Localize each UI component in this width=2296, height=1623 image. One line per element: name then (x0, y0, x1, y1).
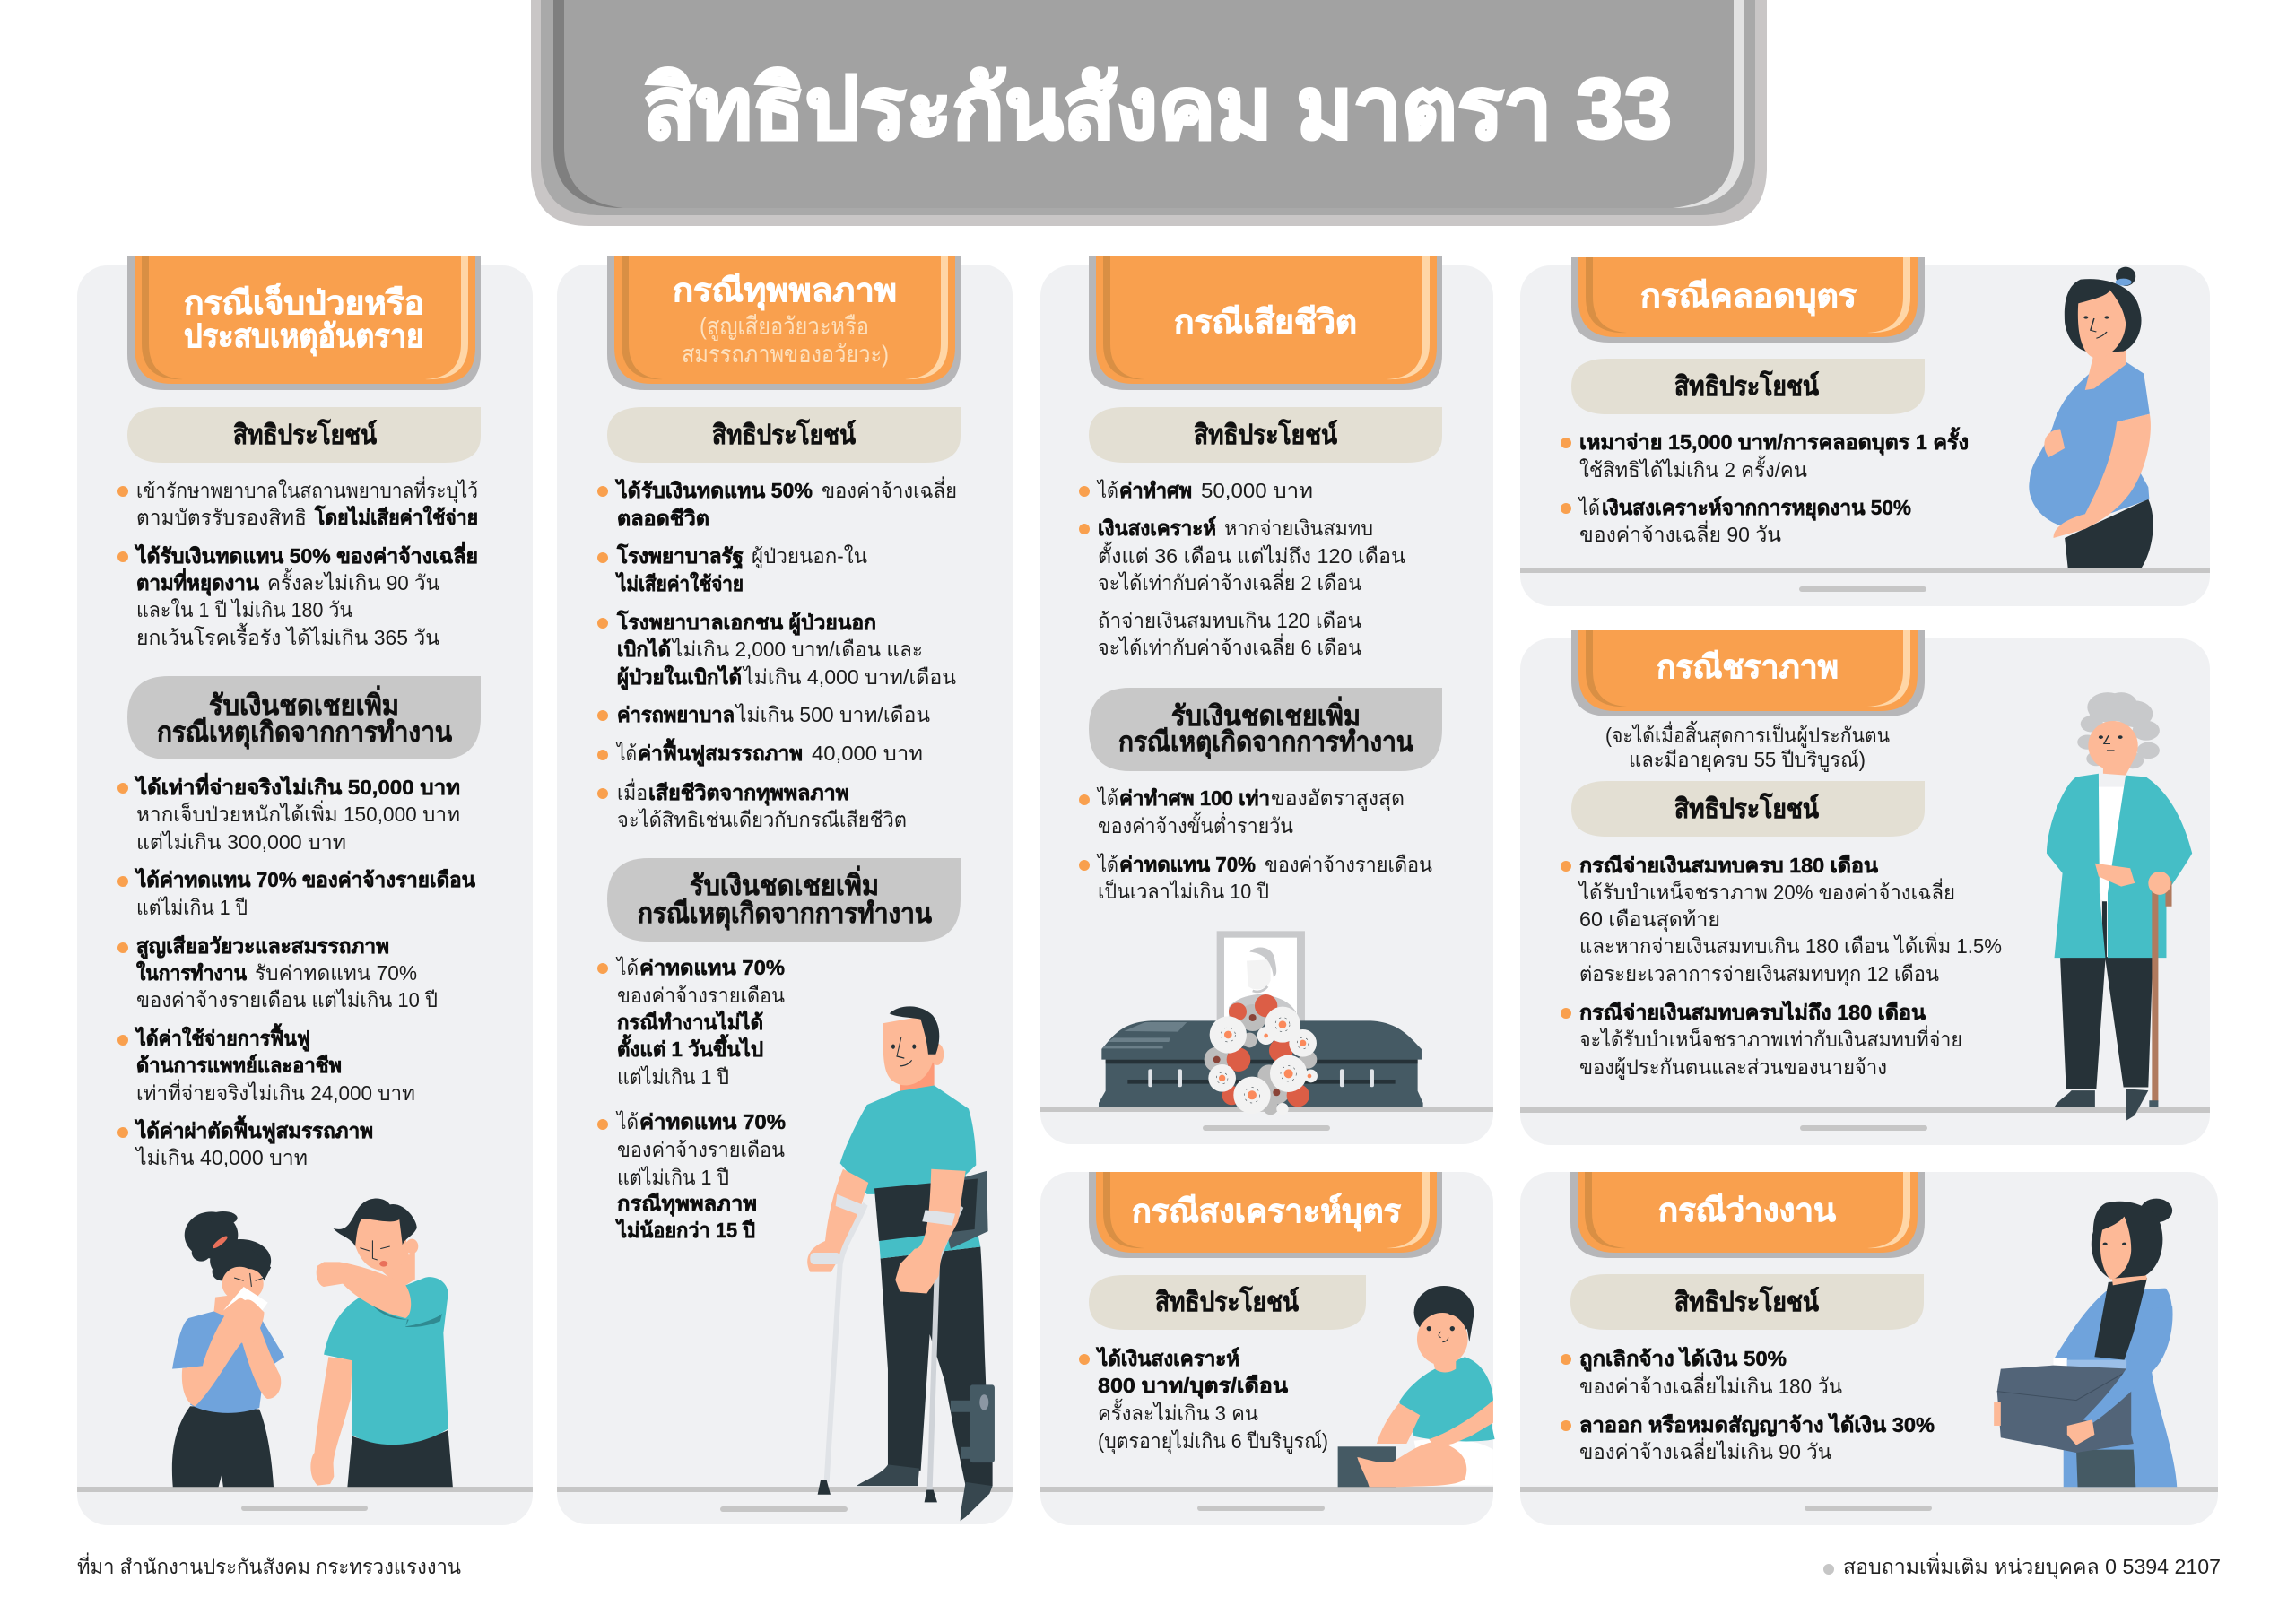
benefit list: เหมาจ่าย 15,000 บาท/การคลอดบุตร 1 ครั้ง (1579, 427, 1969, 456)
compensation list: ของค่าจ้างขั้นต่ำรายวัน (1098, 812, 1293, 838)
benefit list: ไม่เสียค่าใช้จ่าย (614, 571, 744, 595)
benefit list: ลาออก หรือหมดสัญญาจ้าง ได้เงิน 30% (1579, 1412, 1935, 1437)
benefit list (597, 476, 957, 831)
heading: benefits: สิทธิประโยชน์ (1194, 418, 1337, 450)
benefit list: ได้ (1578, 496, 1600, 519)
benefit list (1561, 427, 1969, 546)
tab heading: death (1089, 256, 1442, 390)
benefit list: ผู้ป่วยนอก-ใน (752, 544, 867, 568)
tab heading: childbirth (1571, 257, 1925, 343)
compensation list: ได้ค่าผ่าตัดฟื้นฟูสมรรถภาพ (134, 1115, 373, 1144)
benefit list: ไม่เกิน 500 บาท/เดือน (735, 703, 930, 726)
benefit list: ค่าทำศพ (1119, 479, 1192, 502)
compensation list: แต่ไม่เกิน 1 ปี (617, 1065, 729, 1089)
benefit list: ตามที่หยุดงาน (136, 568, 259, 596)
tab heading: disability: กรณีทุพพลภาพ (673, 272, 897, 311)
benefit list: โรงพยาบาลรัฐ (616, 543, 744, 569)
benefit list: ของค่าจ้างเฉลี่ยไม่เกิน 180 วัน (1579, 1372, 1842, 1398)
benefit list: ของค่าจ้างเฉลี่ย (822, 476, 957, 502)
panel: unemployment (1520, 1172, 2218, 1525)
compensation list: กรณีทำงานไม่ได้ (617, 1010, 763, 1034)
compensation list: ตั้งแต่ 1 วันขึ้นไป (617, 1034, 763, 1061)
compensation list: สูญเสียอวัยวะและสมรรถภาพ (136, 934, 389, 959)
panel: old age (1520, 630, 2210, 1145)
compensation list: ในการทำงาน (136, 960, 247, 985)
benefit list: ยกเว้นโรคเรื้อรัง ได้ไม่เกิน 365 วัน (136, 623, 439, 649)
benefit list: ได้ (615, 742, 637, 765)
illustration: pregnant woman (2029, 267, 2153, 568)
heading: extra compensation (127, 676, 481, 759)
heading: benefits (1570, 1274, 1924, 1330)
heading: benefits: สิทธิประโยชน์ (712, 418, 856, 450)
tab heading: disability: สมรรถภาพของอวัยวะ) (682, 341, 889, 368)
benefit list: ของค่าจ้างเฉลี่ยไม่เกิน 90 วัน (1579, 1437, 1831, 1463)
compensation list: ด้านการแพทย์และอาชีพ (136, 1054, 342, 1077)
heading: extra compensation: กรณีเหตุเกิดจากการทำงาน (157, 716, 452, 750)
tab heading: childbirth: กรณีคลอดบุตร (1640, 277, 1857, 317)
illustration: coffin with portrait and wreath (1099, 931, 1423, 1115)
benefit list: และหากจ่ายเงินสมทบเกิน 180 เดือน ได้เพิ่ม 1.5% (1579, 932, 2002, 958)
heading: benefits: สิทธิประโยชน์ (1674, 792, 1819, 824)
compensation list: ค่าทำศพ 100 เท่า (1119, 786, 1270, 810)
benefit list (1079, 479, 1405, 659)
footer: contact: สอบถามเพิ่มเติม หน่วยบุคคล 0 5394 2107 (1843, 1552, 2221, 1579)
heading: benefits: สิทธิประโยชน์ (1155, 1285, 1299, 1317)
compensation list: ของค่าจ้างรายเดือน แต่ไม่เกิน 10 ปี (136, 988, 438, 1011)
heading: extra compensation: รับเงินชดเชยเพิ่ม (209, 685, 399, 721)
benefit list: จะได้สิทธิเช่นเดียวกับกรณีเสียชีวิต (617, 808, 907, 831)
benefit list: เสียชีวิตจากทุพพลภาพ (648, 781, 849, 806)
compensation list: ได้ (1096, 786, 1118, 810)
tab heading: unemployment: กรณีว่างงาน (1658, 1192, 1836, 1228)
benefit list: เงินสงเคราะห์ (1098, 516, 1216, 540)
panel: sickness or injury (77, 256, 533, 1525)
tab heading: death: กรณีเสียชีวิต (1174, 303, 1357, 340)
heading: benefits (1089, 407, 1442, 463)
footer: source: ที่มา สำนักงานประกันสังคม กระทรวงแรงงาน (77, 1552, 461, 1578)
benefit list: ได้รับเงินทดแทน 50% (614, 478, 813, 502)
benefit list: ถูกเลิกจ้าง ได้เงิน 50% (1579, 1346, 1787, 1372)
tab heading: child allowance: กรณีสงเคราะห์บุตร (1132, 1193, 1402, 1232)
compensation list: ได้ (615, 956, 639, 979)
benefit list: ได้รับบำเหน็จชราภาพ 20% ของค่าจ้างเฉลี่ย (1578, 878, 1955, 904)
compensation list: ได้ (615, 1110, 639, 1133)
illustration: elderly woman with cane (2047, 692, 2192, 1120)
tab heading: disability (607, 256, 961, 390)
benefit list: โดยไม่เสียค่าใช้จ่าย (314, 505, 478, 529)
compensation list: ค่าทดแทน 70% (639, 956, 785, 979)
compensation list: ของอัตราสูงสุด (1271, 786, 1405, 811)
tab heading: child allowance (1089, 1172, 1442, 1258)
benefit list: ถ้าจ่ายเงินสมทบเกิน 120 เดือน (1098, 609, 1361, 632)
heading: benefits: สิทธิประโยชน์ (233, 418, 377, 450)
benefit list: ได้เงินสงเคราะห์ (1095, 1346, 1239, 1370)
compensation list: แต่ไม่เกิน 1 ปี (617, 1166, 729, 1189)
benefit list: ตามบัตรรับรองสิทธิ (136, 506, 307, 529)
heading: benefits (127, 407, 481, 463)
benefit list: 800 บาท/บุตร/เดือน (1098, 1374, 1288, 1399)
note: eligibility (1605, 721, 1890, 772)
benefit list: ค่าฟื้นฟูสมรรถภาพ (638, 738, 803, 767)
benefit list: จะได้เท่ากับค่าจ้างเฉลี่ย 2 เดือน (1098, 568, 1361, 595)
compensation list: กรณีทุพพลภาพ (617, 1192, 757, 1217)
compensation list: ได้เท่าที่จ่ายจริงไม่เกิน 50,000 บาท (134, 772, 460, 799)
tab heading: sickness: ประสบเหตุอันตราย (184, 317, 423, 357)
benefit list: (บุตรอายุไม่เกิน 6 ปีบริบูรณ์) (1098, 1429, 1328, 1454)
tab heading: old age: กรณีชราภาพ (1657, 648, 1839, 685)
benefit list: กรณีจ่ายเงินสมทบครบไม่ถึง 180 เดือน (1579, 1000, 1926, 1024)
benefit list (1561, 1346, 1935, 1463)
benefit list (1079, 1346, 1328, 1454)
tab heading: disability: (สูญเสียอวัยวะหรือ (700, 313, 869, 341)
compensation list: ค่าทดแทน 70% (639, 1110, 786, 1133)
illustration: child sitting with box (1338, 1286, 1495, 1487)
heading: benefits (1571, 359, 1925, 414)
benefit list: หากจ่ายเงินสมทบ (1224, 516, 1373, 540)
title text: สิทธิประกันสังคม มาตรา 33 (643, 61, 1672, 157)
benefit list (117, 476, 478, 649)
benefit list: ของผู้ประกันตนและส่วนของนายจ้าง (1579, 1055, 1887, 1080)
panel: childbirth (1520, 257, 2210, 606)
heading: extra compensation (607, 858, 961, 942)
compensation list (1079, 786, 1432, 903)
panel: disability (557, 256, 1013, 1524)
compensation list: ไม่น้อยกว่า 15 ปี (614, 1218, 755, 1242)
benefit list: เมื่อ (617, 778, 648, 804)
illustration: woman sneezing and man coughing (172, 1199, 453, 1487)
panel: death (1040, 256, 1493, 1144)
compensation list: เป็นเวลาไม่เกิน 10 ปี (1098, 878, 1269, 903)
benefit list: ต่อระยะเวลาการจ่ายเงินสมทบทุก 12 เดือน (1579, 962, 1939, 986)
compensation list: ของค่าจ้างรายเดือน (1265, 853, 1432, 876)
benefit list: ไม่เกิน 4,000 บาท/เดือน (742, 665, 956, 689)
benefit list: เงินสงเคราะห์จากการหยุดงาน 50% (1602, 496, 1911, 521)
compensation list (117, 772, 475, 1169)
tab heading: sickness: กรณีเจ็บป่วยหรือ (184, 282, 424, 321)
illustration: man on crutches (807, 1006, 995, 1521)
benefit list: จะได้เท่ากับค่าจ้างเฉลี่ย 6 เดือน (1098, 633, 1361, 659)
compensation list (597, 956, 786, 1242)
tab heading: sickness (127, 256, 481, 390)
benefit list: ค่ารถพยาบาล (617, 703, 735, 726)
heading: extra compensation: รับเงินชดเชยเพิ่ม (690, 865, 879, 901)
benefit list: 40,000 บาท (812, 742, 923, 765)
benefit list: กรณีจ่ายเงินสมทบครบ 180 เดือน (1579, 854, 1878, 877)
benefit list: ใช้สิทธิได้ไม่เกิน 2 ครั้ง/คน (1579, 456, 1807, 482)
heading: extra compensation: กรณีเหตุเกิดจากการทำงาน (1118, 726, 1413, 759)
heading: benefits (1571, 781, 1925, 837)
benefit list: ของค่าจ้างเฉลี่ย 90 วัน (1579, 520, 1781, 546)
benefit list: ครั้งละไม่เกิน 3 คน (1098, 1399, 1258, 1425)
benefit list: ครั้งละไม่เกิน 90 วัน (267, 568, 439, 595)
benefit list: เข้ารักษาพยาบาลในสถานพยาบาลที่ระบุไว้ (136, 476, 478, 503)
panel: child allowance (1040, 1172, 1495, 1525)
benefit list (1561, 854, 2002, 1080)
illustration: woman carrying box (1994, 1199, 2177, 1487)
compensation list: ได้ค่าทดแทน 70% ของค่าจ้างรายเดือน (134, 867, 475, 891)
benefit list: ผู้ป่วยในเบิกได้ (617, 664, 742, 690)
benefit list: ตลอดชีวิต (617, 507, 709, 530)
benefit list: เบิกได้ (617, 637, 671, 661)
benefit list: ได้ (1096, 479, 1118, 502)
benefit list: จะได้รับบำเหน็จชราภาพเท่ากับเงินสมทบที่จ่าย (1579, 1025, 1962, 1051)
compensation list: ของค่าจ้างรายเดือน (617, 984, 785, 1007)
compensation list: แต่ไม่เกิน 300,000 บาท (136, 830, 346, 854)
benefit list: ตั้งแต่ 36 เดือน แต่ไม่ถึง 120 เดือน (1098, 542, 1405, 568)
heading: benefits (1089, 1275, 1366, 1330)
title banner (531, 0, 1767, 226)
heading: extra compensation (1089, 688, 1442, 771)
compensation list: เท่าที่จ่ายจริงไม่เกิน 24,000 บาท (136, 1079, 415, 1105)
heading: benefits (607, 407, 961, 463)
compensation list: ได้ค่าใช้จ่ายการฟื้นฟู (134, 1023, 310, 1052)
heading: extra compensation: กรณีเหตุเกิดจากการทำงาน (638, 898, 932, 931)
benefit list: 60 เดือนสุดท้าย (1579, 907, 1720, 932)
compensation list: รับค่าทดแทน 70% (255, 961, 417, 985)
benefit list: ได้รับเงินทดแทน 50% ของค่าจ้างเฉลี่ย (134, 541, 478, 568)
compensation list: แต่ไม่เกิน 1 ปี (136, 896, 248, 919)
tab heading: unemployment (1570, 1172, 1925, 1258)
benefit list: 50,000 บาท (1201, 479, 1313, 502)
tab heading: old age (1571, 630, 1925, 716)
compensation list: ไม่เกิน 40,000 บาท (135, 1146, 308, 1169)
heading: benefits: สิทธิประโยชน์ (1674, 1285, 1819, 1317)
note: eligibility: และมีอายุครบ 55 ปีบริบูรณ์) (1629, 748, 1866, 772)
compensation list: ค่าทดแทน 70% (1119, 853, 1256, 876)
compensation list: ของค่าจ้างรายเดือน (617, 1138, 785, 1161)
heading: benefits: สิทธิประโยชน์ (1674, 369, 1819, 402)
benefit list: ไม่เกิน 2,000 บาท/เดือน และ (671, 638, 923, 661)
compensation list: ได้ (1096, 853, 1118, 876)
heading: extra compensation: รับเงินชดเชยเพิ่ม (1171, 696, 1361, 732)
benefit list: และใน 1 ปี ไม่เกิน 180 วัน (136, 598, 352, 621)
benefit list: โรงพยาบาลเอกชน ผู้ป่วยนอก (616, 610, 876, 636)
note: eligibility: (จะได้เมื่อสิ้นสุดการเป็นผู้ประกันตน (1605, 721, 1890, 748)
compensation list: หากเจ็บป่วยหนักได้เพิ่ม 150,000 บาท (136, 800, 460, 826)
